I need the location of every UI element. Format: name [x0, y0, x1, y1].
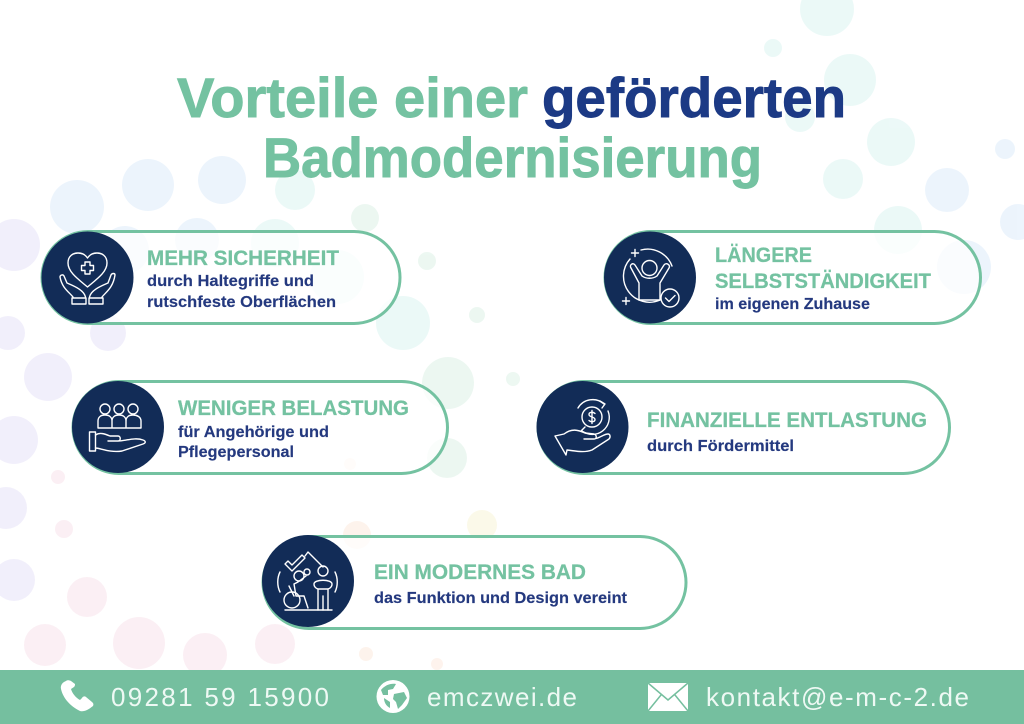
icon: envelope [648, 683, 688, 711]
text: Mehr Sicherheit: durch Haltegriffe und [147, 273, 314, 290]
panel: Ein modernes Bad [262, 535, 686, 628]
panel: Längere Selbstständigkeit [604, 232, 980, 324]
icon: phone [61, 680, 93, 711]
contact: website: emczwei.de [427, 682, 577, 712]
footer bar [0, 670, 1024, 724]
panel: Weniger Belastung [72, 381, 448, 474]
text: Längere Selbstständigkeit: LÄNGERE [715, 244, 812, 267]
text: Weniger Belastung: für Angehörige und [178, 424, 329, 441]
panel: Finanzielle Entlastung [536, 381, 950, 474]
icon: heart with cross held by hands [60, 253, 115, 304]
title: Vorteile einer [177, 66, 528, 129]
title [177, 66, 846, 189]
title: Badmodernisierung [263, 126, 762, 189]
contact: email: kontakt@e-m-c-2.de [706, 682, 969, 712]
text: Mehr Sicherheit: MEHR SICHERHEIT [147, 247, 339, 270]
text: Finanzielle Entlastung: FINANZIELLE ENTLASTUNG [647, 409, 927, 432]
text: Weniger Belastung: WENIGER BELASTUNG [178, 397, 409, 420]
text: Ein modernes Bad: EIN MODERNES BAD [374, 561, 586, 584]
title: geförderten [542, 66, 846, 129]
text: Weniger Belastung: Pflegepersonal [178, 444, 294, 461]
text: Ein modernes Bad: das Funktion und Design vereint [374, 590, 627, 607]
text: Ein modernes Bad [374, 561, 627, 607]
text: Mehr Sicherheit: rutschfeste Oberflächen [147, 294, 336, 311]
text: Mehr Sicherheit [147, 247, 339, 311]
text: Finanzielle Entlastung [647, 409, 927, 455]
icon: globe [376, 680, 410, 713]
text: Längere Selbstständigkeit: SELBSTSTÄNDIGKEIT [715, 270, 931, 293]
text: Längere Selbstständigkeit: im eigenen Zuhause [715, 296, 870, 313]
text: Weniger Belastung [178, 397, 409, 461]
icon: person with raised arms in circle [622, 249, 679, 307]
icon: group of people above open hand [90, 404, 145, 451]
text: Längere Selbstständigkeit [715, 244, 931, 313]
icon: wheelchair user and caregiver under roof [278, 552, 337, 610]
contact: phone number: 09281 59 15900 [111, 682, 329, 712]
panel: Mehr Sicherheit [42, 232, 400, 324]
icon: coin with arrows above hand [555, 400, 610, 455]
text: Finanzielle Entlastung: durch Fördermittel [647, 438, 794, 455]
